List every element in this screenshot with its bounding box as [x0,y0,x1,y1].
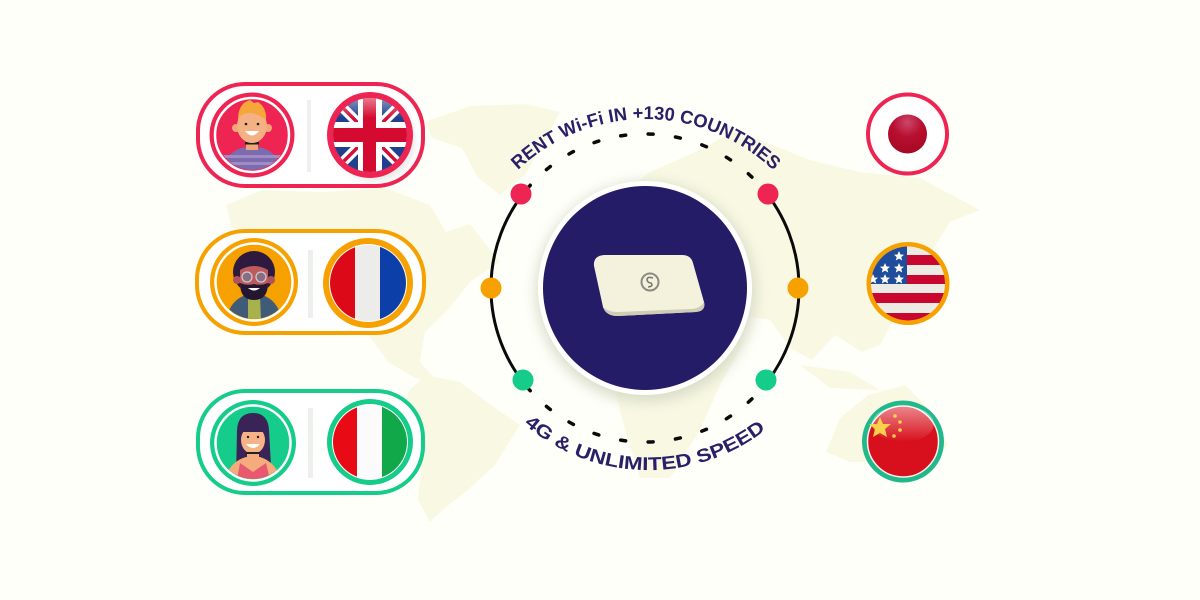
avatar: woman with long dark hair [210,400,296,486]
avatar: man with blond hair [210,92,294,178]
North America [226,188,500,384]
stars [868,251,904,284]
divider [307,100,311,172]
ring connector: solid arcs [491,189,799,387]
South America [404,375,520,522]
central hub with device [538,181,752,395]
curved heading: bottom: 4G & UNLIMITED SPEED [526,418,763,470]
icon: pocket Wi-Fi router [594,255,704,316]
flag: United States [866,242,950,325]
pill: France traveller [197,231,424,333]
flag: France [323,238,413,328]
stars [869,414,902,438]
Europe and Asia [575,130,980,360]
flag: China [862,400,944,482]
divider [308,408,313,478]
flag: Japan [868,94,947,174]
curved heading: top: RENT Wi-Fi IN +130 COUNTRIES [510,106,780,170]
avatar: bearded man with glasses [210,238,298,326]
Australia [826,385,948,468]
Greenland [425,104,560,195]
pill: UK traveller [198,84,423,186]
hub shadow [536,182,756,402]
world map background [226,104,980,522]
flag: Italy [327,399,413,485]
node dots [480,184,808,390]
ring connector: dashed arcs [527,134,763,442]
Islands [800,365,880,390]
pill: Italy traveller [198,391,423,493]
Africa [552,272,745,478]
flag: United Kingdom [327,92,413,178]
divider [308,250,313,318]
